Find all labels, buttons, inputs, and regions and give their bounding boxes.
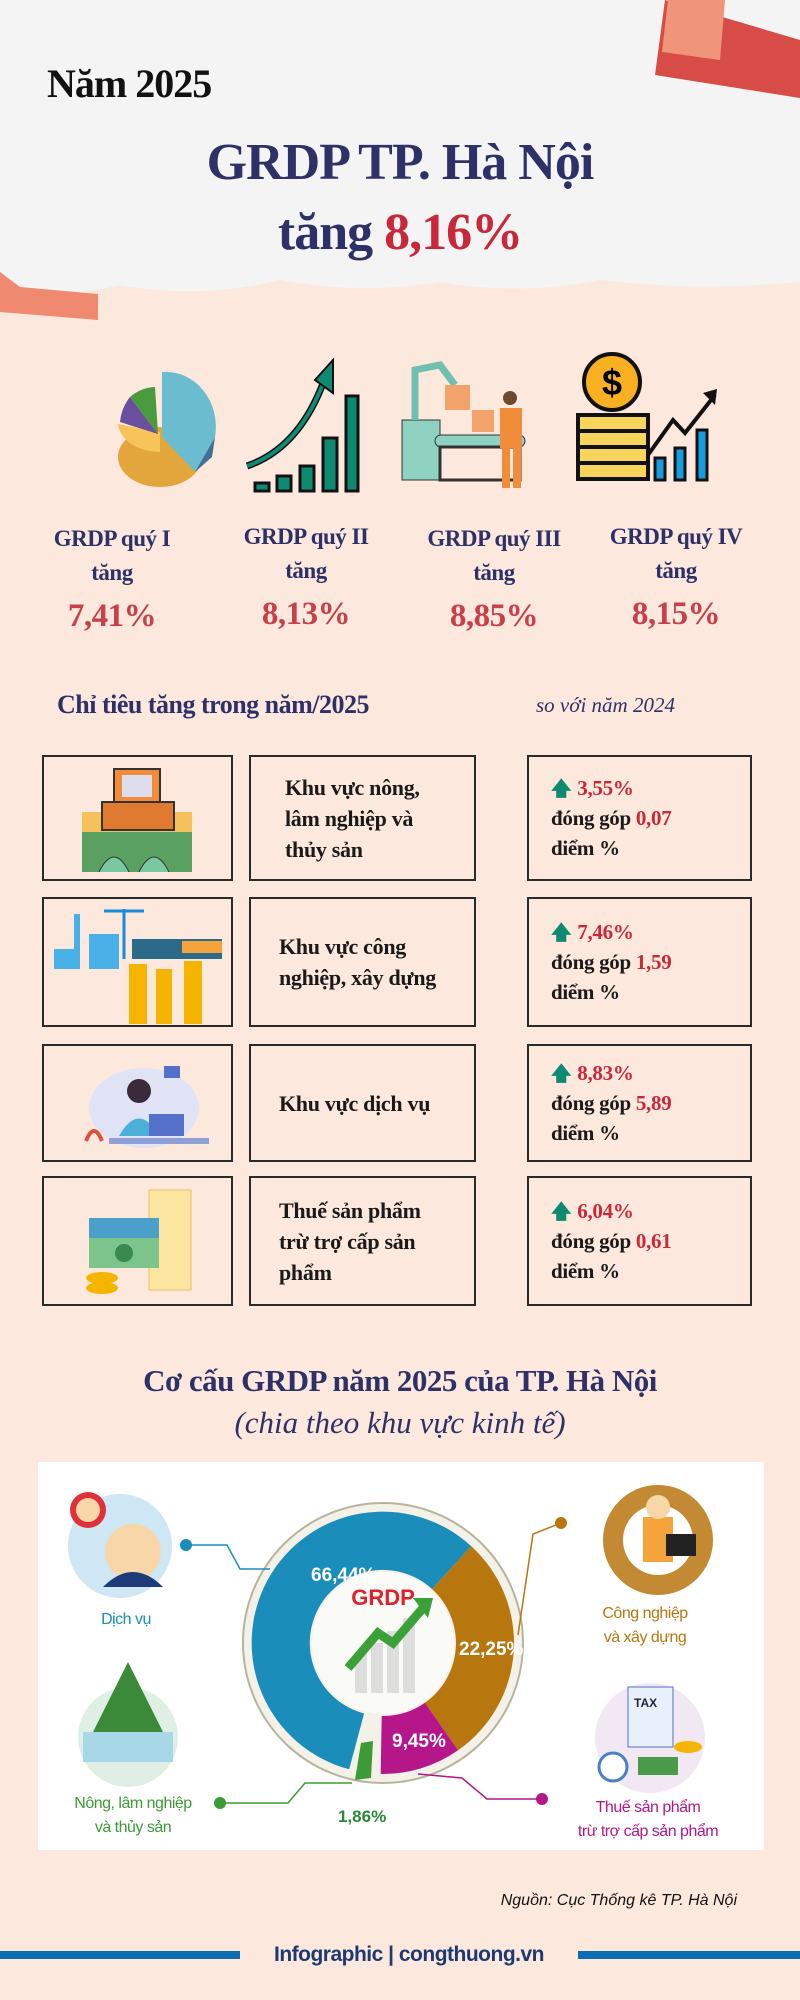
quarter III bbox=[427, 526, 561, 634]
row 1 bbox=[42, 755, 752, 881]
structure subheading: (chia theo khu vực kinh tế) bbox=[234, 1405, 566, 1440]
stat: 8,83%: diểm % bbox=[551, 1121, 620, 1145]
quarter III: 8,85% bbox=[450, 598, 538, 634]
donut: GRDP bbox=[351, 1585, 415, 1610]
note: so với năm 2024: so với năm 2024 bbox=[536, 693, 675, 717]
quarter II bbox=[244, 524, 368, 632]
quarter III: tăng bbox=[473, 560, 515, 585]
text: Khu vực công nghiệp, xây dựng: Khu vực công bbox=[279, 934, 406, 959]
icon: coins chart bbox=[576, 352, 717, 482]
stat: 3,55%: 🡅 bbox=[551, 776, 571, 800]
text: Khu vực nông, lâm nghiệp và thủy sản bbox=[249, 755, 476, 881]
stat: 3,55%: 3,55% bbox=[577, 776, 634, 800]
label: Công nghiệp và xây dựng: và xây dựng bbox=[604, 1629, 686, 1646]
stat: 8,83%: đóng góp 5,89 bbox=[551, 1091, 671, 1115]
stat: 6,04% bbox=[527, 1176, 752, 1306]
donut: 9,45% bbox=[392, 1731, 446, 1752]
title bbox=[207, 134, 594, 261]
icon: coins chart: $ bbox=[602, 362, 622, 403]
text: Khu vực nông, lâm nghiệp và thủy sản: Khu vực nông, bbox=[285, 774, 420, 800]
stat: 3,55%: đóng góp 0,07 bbox=[551, 806, 671, 830]
stat: 6,04%: diểm % bbox=[551, 1259, 620, 1283]
quarter II: tăng bbox=[285, 558, 327, 583]
text: Khu vực công nghiệp, xây dựng: nghiệp, xây dựng bbox=[279, 965, 436, 990]
source: Nguồn: Cục Thống kê TP. Hà Nội bbox=[501, 1892, 737, 1909]
stat: 8,83%: 8,83% bbox=[577, 1061, 634, 1085]
stat: 7,46%: diểm % bbox=[551, 980, 620, 1004]
donut: 66,44% bbox=[311, 1565, 376, 1586]
stat: 6,04%: 6,04% bbox=[577, 1199, 634, 1223]
row 4 bbox=[42, 1176, 752, 1306]
label: Thuế sản phẩm bbox=[578, 1799, 718, 1840]
quarter IV: 8,15% bbox=[632, 596, 720, 632]
quarter II: 8,13% bbox=[262, 596, 350, 632]
row 2 bbox=[42, 897, 752, 1027]
footer: Infographic | congthuong.vn bbox=[274, 1943, 544, 1966]
text: Khu vực công nghiệp, xây dựng bbox=[249, 897, 476, 1027]
text: Thuế sản phẩm trừ trợ cấp sản phẩm bbox=[249, 1176, 476, 1306]
text: Thuế sản phẩm trừ trợ cấp sản phẩm: Thuế sản phẩm bbox=[279, 1198, 421, 1222]
subtitle: Năm 2025: Năm 2025 bbox=[47, 61, 211, 106]
label: Công nghiệp và xây dựng bbox=[602, 1605, 688, 1646]
row 3 bbox=[42, 1044, 752, 1162]
stat: 7,46%: 7,46% bbox=[577, 920, 634, 944]
stat: 7,46%: 🡅 bbox=[551, 920, 571, 944]
stat: 3,55% bbox=[527, 755, 752, 881]
icon: growth bars bbox=[246, 358, 360, 492]
label: Thuế sản phẩm: Thuế sản phẩm bbox=[596, 1799, 700, 1816]
stat: 8,83%: 🡅 bbox=[551, 1061, 571, 1085]
panel: donut chart: 1,86% bbox=[338, 1807, 386, 1826]
panel: donut chart: TAX bbox=[634, 1696, 657, 1710]
text: Khu vực nông, lâm nghiệp và thủy sản: thủy sản bbox=[285, 836, 363, 862]
quarter III: GRDP quý III bbox=[427, 526, 561, 551]
quarter IV: GRDP quý IV bbox=[610, 524, 742, 549]
icon: factory worker bbox=[402, 361, 526, 488]
stat: 7,46% bbox=[527, 897, 752, 1027]
quarter IV bbox=[610, 524, 742, 632]
stat: 6,04%: 🡅 bbox=[551, 1199, 571, 1223]
label: Nông, lâm nghiệp và thủy sản: Nông, lâm nghiệp bbox=[74, 1795, 192, 1812]
stat: 8,83% bbox=[527, 1044, 752, 1162]
text: Khu vực dịch vụ bbox=[249, 1044, 476, 1162]
stat: 7,46%: đóng góp 1,59 bbox=[551, 950, 671, 974]
label: Thuế sản phẩm: trừ trợ cấp sản phẩm bbox=[578, 1823, 718, 1840]
quarter I: tăng bbox=[91, 560, 133, 585]
stat: 3,55%: diểm % bbox=[551, 836, 620, 860]
icon box: tractor bbox=[42, 755, 233, 881]
icon box: service desk bbox=[42, 1044, 233, 1162]
title: GRDP TP. Hà Nội bbox=[207, 134, 593, 191]
label: Nông, lâm nghiệp và thủy sản: và thủy sản bbox=[95, 1819, 171, 1836]
donut: 22,25% bbox=[459, 1639, 524, 1660]
label: Nông, lâm nghiệp và thủy sản bbox=[74, 1795, 192, 1836]
text: Khu vực dịch vụ: Khu vực dịch vụ bbox=[279, 1090, 430, 1116]
icon circles bbox=[68, 1494, 172, 1598]
quarter I: 7,41% bbox=[68, 598, 156, 634]
label: Công nghiệp và xây dựng: Công nghiệp bbox=[602, 1605, 688, 1622]
quarter IV: tăng bbox=[655, 558, 697, 583]
icon box: construction bbox=[42, 897, 233, 1027]
title: tăng 8,16% bbox=[278, 204, 522, 261]
structure heading: Cơ cấu GRDP năm 2025 của TP. Hà Nội bbox=[143, 1363, 657, 1398]
decoration: top-right torn paper bbox=[655, 0, 800, 98]
panel: donut chart bbox=[38, 1462, 764, 1850]
label: Dịch vụ: Dịch vụ bbox=[101, 1611, 151, 1628]
footer bbox=[0, 1943, 800, 1966]
text: Khu vực nông, lâm nghiệp và thủy sản: lâm nghiệp và bbox=[285, 806, 413, 830]
text: Thuế sản phẩm trừ trợ cấp sản phẩm: trừ trợ cấp sản bbox=[279, 1228, 415, 1254]
quarter II: GRDP quý II bbox=[244, 524, 368, 549]
donut bbox=[243, 1503, 524, 1783]
icon box: money bbox=[42, 1176, 233, 1306]
text: Thuế sản phẩm trừ trợ cấp sản phẩm: phẩm bbox=[279, 1260, 332, 1284]
decoration: left torn paper bbox=[0, 272, 98, 320]
quarter I bbox=[54, 526, 170, 634]
stat: 6,04%: đóng góp 0,61 bbox=[551, 1229, 671, 1253]
quarter I: GRDP quý I bbox=[54, 526, 170, 551]
section heading: Chỉ tiêu tăng trong năm/2025 bbox=[57, 690, 369, 719]
icon: pie chart bbox=[118, 372, 216, 487]
header background bbox=[0, 0, 800, 300]
connectors bbox=[186, 1545, 270, 1569]
